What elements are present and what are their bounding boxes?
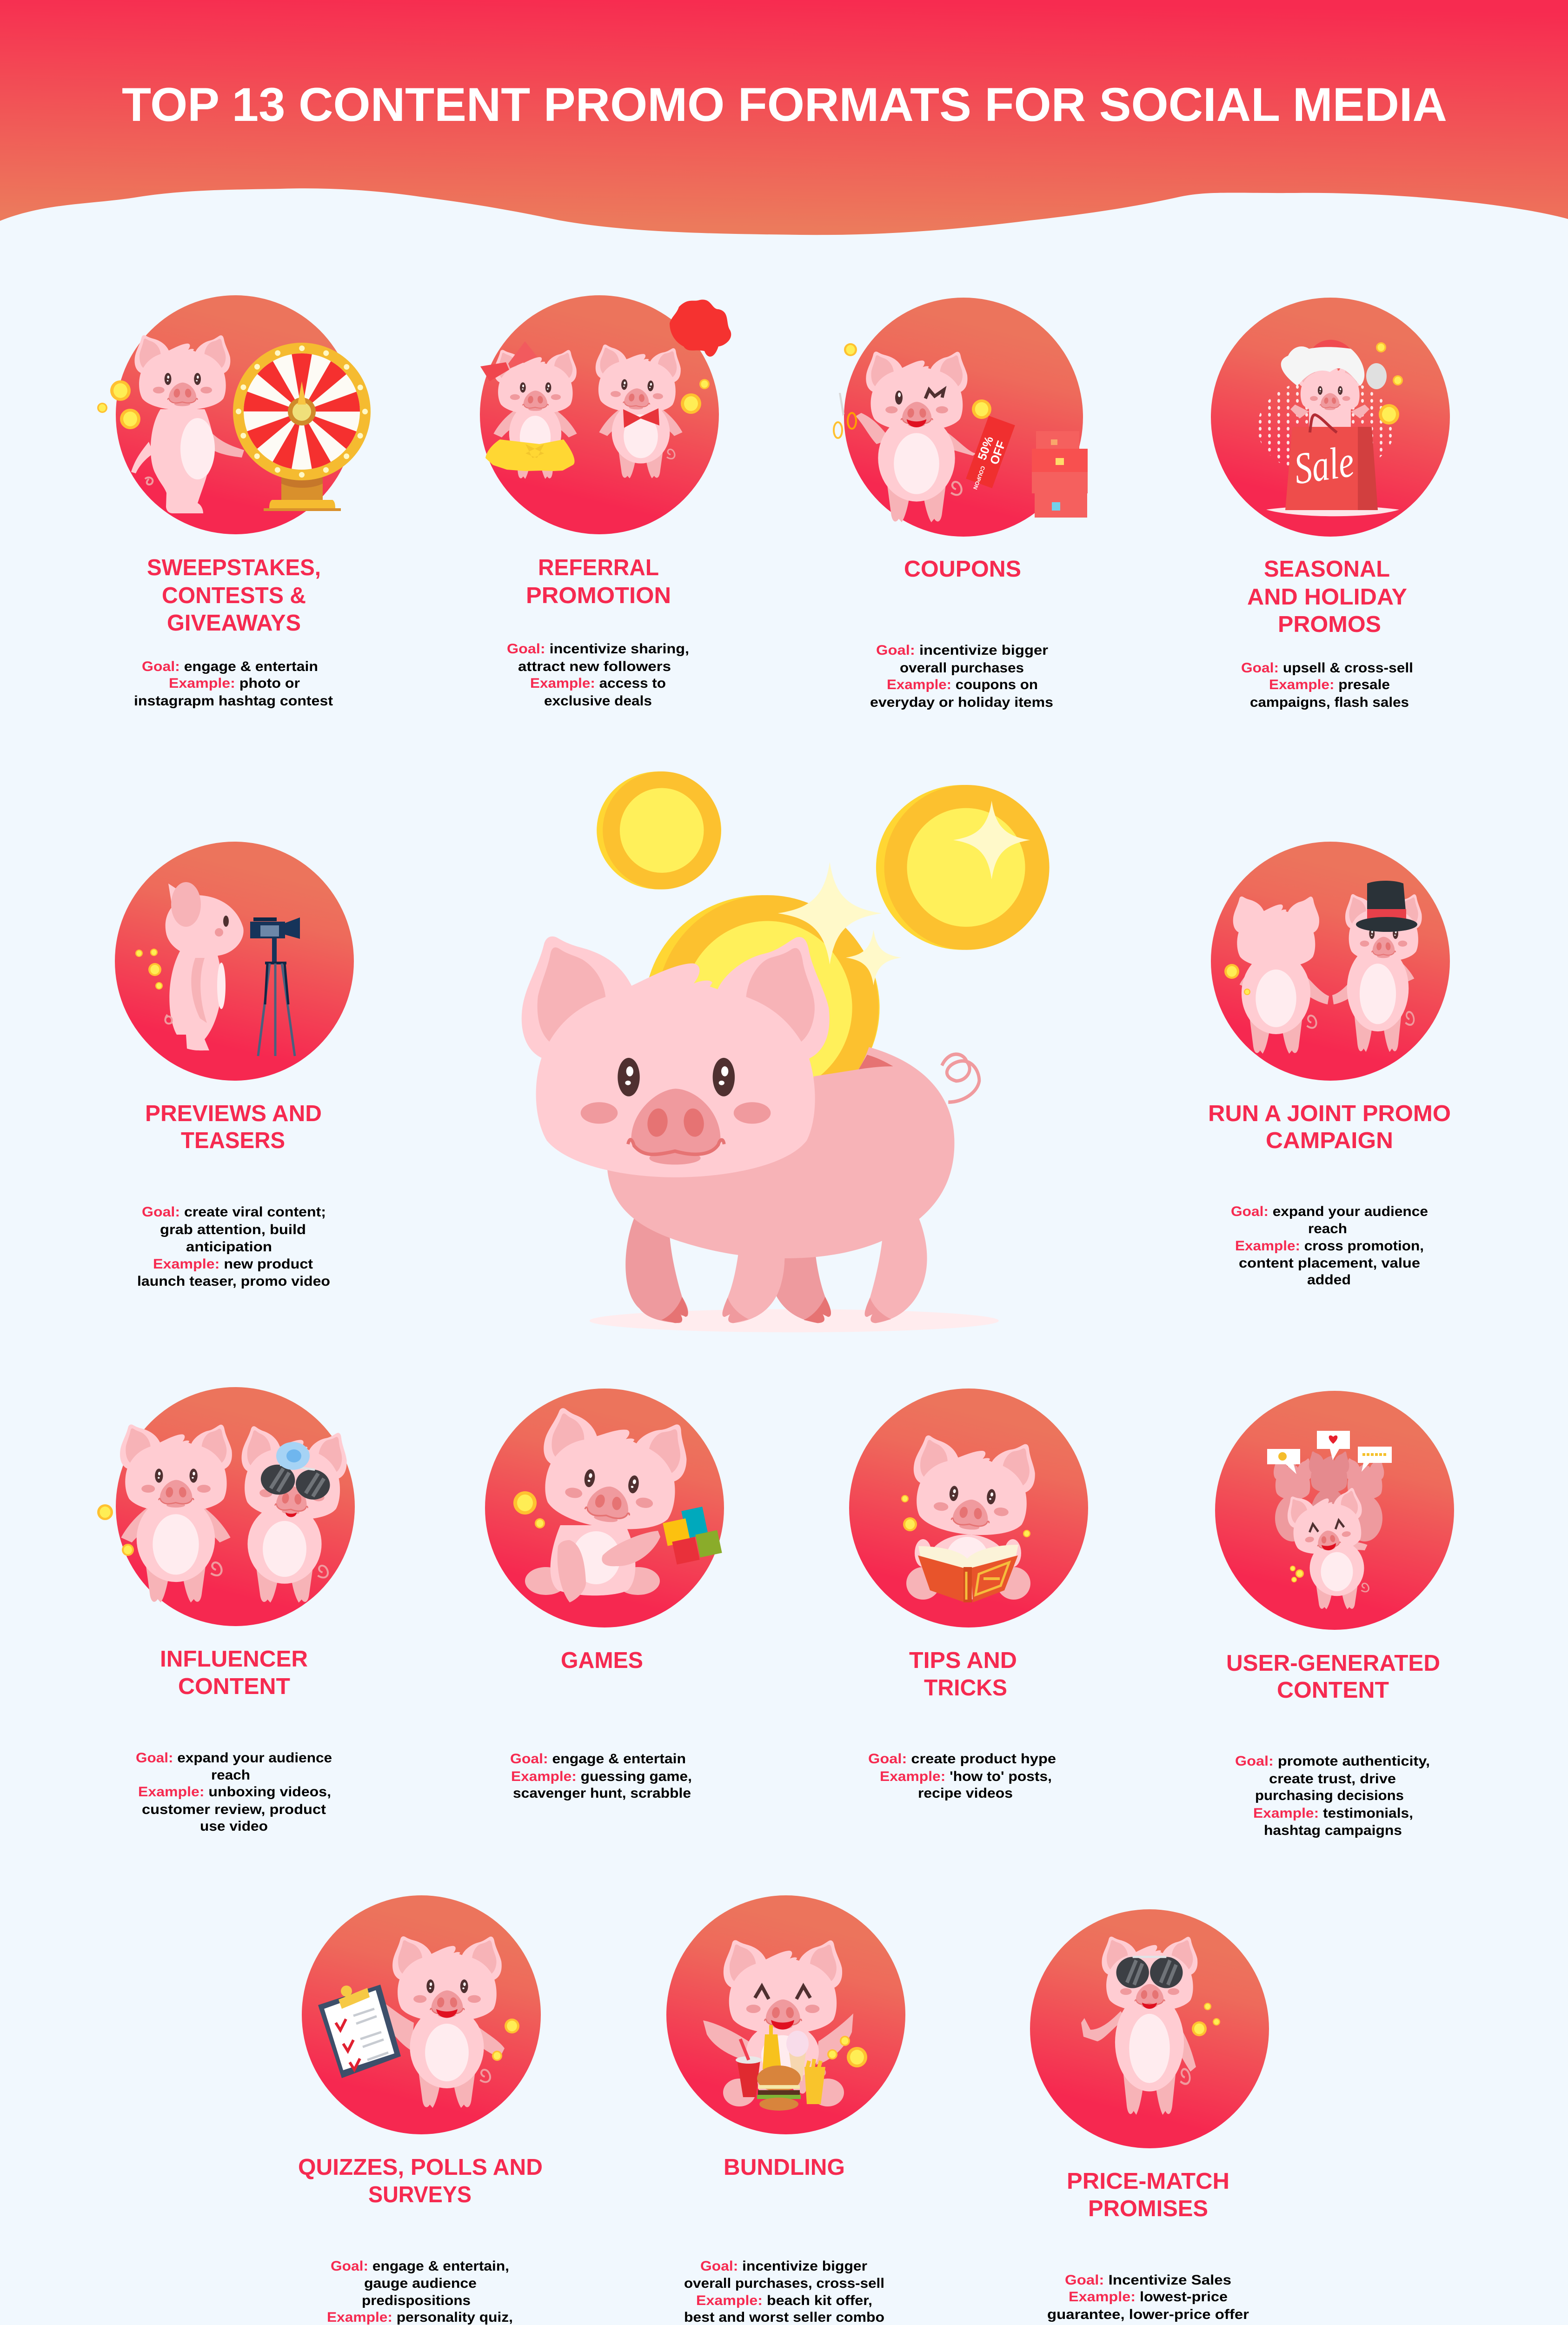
goal and example text: [136, 1750, 332, 1834]
panel: coupons: [834, 298, 1088, 710]
panel: referral promotion: [480, 295, 731, 709]
panel: sweepstakes, contests and giveaways: [97, 295, 371, 709]
heading: USER-GENERATED: [1226, 1651, 1440, 1676]
heading: CONTENT: [178, 1674, 290, 1699]
goal and example text: [1241, 660, 1413, 710]
circle background: [302, 1895, 541, 2134]
title: TOP 13 CONTENT PROMO FORMATS FOR SOCIAL MEDIA: [122, 78, 1447, 131]
panel: price-match promises: [1030, 1909, 1269, 2325]
heading: TRICKS: [924, 1675, 1007, 1701]
front legs: [723, 1218, 927, 1323]
heading: CONTESTS &: [162, 583, 306, 608]
goal and example text: Example: new product: [153, 1256, 313, 1272]
icon: santa pig in sale bag: [1257, 340, 1403, 516]
heading: [1067, 2169, 1229, 2221]
icon: two pigs, one in sunglasses: [97, 1424, 349, 1602]
panel: games: [485, 1388, 724, 1801]
panel: influencer content: [97, 1387, 355, 1834]
panel: run a joint promo campaign: [1208, 842, 1451, 1288]
panel: previews and teasers: [115, 842, 354, 1289]
heading: PROMOTION: [526, 583, 671, 608]
panel: bundling: [666, 1895, 905, 2325]
heading: [145, 1101, 322, 1153]
heading: TIPS AND: [909, 1648, 1017, 1673]
circle background: [1030, 1909, 1269, 2148]
heading: AND HOLIDAY: [1247, 585, 1407, 610]
icon: santa pig in sale bag: Sale: [1291, 436, 1357, 493]
goal and example text: [1047, 2272, 1249, 2325]
circle background: [1211, 298, 1450, 537]
goal and example text: reach: [1308, 1221, 1347, 1236]
heading: [147, 555, 321, 636]
head: [522, 937, 830, 1177]
icon: winking pig with coupon, scissors and boxes: 50%: [975, 434, 996, 462]
icon: happy pig with fast food bundle: [703, 1940, 867, 2111]
goal and example text: Goal: engage & entertain: [142, 659, 318, 674]
heading: RUN A JOINT PROMO: [1208, 1101, 1451, 1126]
goal and example text: scavenger hunt, scrabble: [513, 1786, 691, 1801]
icon: pig with prize wheel: [97, 335, 371, 513]
heading: REFERRAL: [538, 555, 659, 580]
heading: [1208, 1101, 1451, 1153]
goal and example text: Example: lowest-price: [1069, 2289, 1228, 2305]
back legs: [625, 1214, 831, 1323]
goal and example text: hashtag campaigns: [1264, 1823, 1402, 1838]
heading: SEASONAL: [1264, 557, 1390, 582]
panel: tips and tricks: [849, 1388, 1088, 1801]
goal and example text: Example: personality quiz,: [327, 2310, 513, 2325]
goal and example text: recipe videos: [918, 1786, 1013, 1801]
heading: INFLUENCER: [160, 1647, 308, 1672]
circle background: [116, 295, 355, 534]
heading: SWEEPSTAKES,: [147, 555, 321, 580]
circle background: [115, 842, 354, 1081]
goal and example text: content placement, value: [1239, 1256, 1420, 1271]
panel: quizzes, polls and surveys: [298, 1895, 543, 2325]
illustration: central piggy bank with coins: [522, 771, 1050, 1332]
goal and example text: customer review, product: [142, 1802, 326, 1817]
goal and example text: [684, 2259, 884, 2325]
heading: GIVEAWAYS: [167, 611, 301, 636]
icon: sitting pig with puzzle pieces: [513, 1406, 722, 1602]
icon: two pigs with bow, skirt and speech blob: [480, 299, 731, 479]
icon: winking pig with coupon, scissors and boxes: COUPON: [972, 465, 986, 490]
heading: PROMISES: [1088, 2196, 1208, 2221]
goal and example text: Goal: Incentivize Sales: [1065, 2272, 1231, 2288]
circle background: [1211, 842, 1450, 1081]
goal and example text: use video: [200, 1819, 268, 1834]
goal and example text: overall purchases: [900, 660, 1024, 676]
goal and example text: Example: photo or: [169, 676, 300, 691]
circle background: [116, 1387, 355, 1626]
goal and example text: everyday or holiday items: [870, 695, 1053, 710]
goal and example text: exclusive deals: [544, 693, 652, 709]
goal and example text: Goal: create product hype: [868, 1751, 1056, 1767]
icon: profile pig filming with camera on tripod: [135, 882, 300, 1056]
goal and example text: Goal: engage & entertain: [510, 1751, 686, 1767]
goal and example text: Example: unboxing videos,: [138, 1784, 331, 1800]
goal and example text: [868, 1751, 1056, 1801]
heading: [1226, 1651, 1440, 1703]
goal and example text: Example: testimonials,: [1253, 1806, 1413, 1821]
heading: [1247, 557, 1407, 637]
goal and example text: Goal: upsell & cross-sell: [1241, 660, 1413, 676]
goal and example text: attract new followers: [518, 659, 671, 674]
goal and example text: instagrapm hashtag contest: [134, 693, 333, 709]
heading: BUNDLING: [724, 2155, 845, 2180]
goal and example text: Goal: expand your audience: [136, 1750, 332, 1766]
goal and example text: [137, 1204, 330, 1289]
goal and example text: purchasing decisions: [1255, 1788, 1404, 1803]
heading: QUIZZES, POLLS AND: [298, 2155, 543, 2180]
goal and example text: Goal: create viral content;: [142, 1204, 326, 1220]
heading: PREVIEWS AND: [145, 1101, 322, 1126]
heading: SURVEYS: [368, 2182, 472, 2207]
goal and example text: campaigns, flash sales: [1250, 695, 1409, 710]
wave header shape: [0, 0, 1568, 235]
icon: pig with clipboard: [318, 1936, 519, 2108]
panel: seasonal and holiday promos: [1211, 298, 1450, 710]
goal and example text: grab attention, build: [160, 1222, 306, 1237]
curly tail: [942, 1054, 979, 1102]
icon: winking pig with coupon, scissors and boxes: OFF: [987, 439, 1008, 466]
goal and example text: Example: cross promotion,: [1235, 1238, 1424, 1254]
floating coin right: [876, 785, 1050, 950]
goal and example text: guarantee, lower-price offer: [1047, 2307, 1249, 2322]
goal and example text: added: [1307, 1272, 1351, 1288]
goal and example text: anticipation: [186, 1239, 272, 1255]
icon: pig reading a book: [901, 1435, 1038, 1602]
goal and example text: best and worst seller combo: [684, 2310, 884, 2325]
goal and example text: Example: coupons on: [887, 677, 1038, 692]
coin entering slot: [644, 895, 880, 1120]
goal and example text: [327, 2259, 513, 2325]
heading: [298, 2155, 543, 2207]
circle background: [480, 295, 719, 534]
panel: user-generated content: [1215, 1391, 1454, 1838]
goal and example text: [870, 643, 1053, 710]
goal and example text: create trust, drive: [1269, 1771, 1396, 1787]
header band: [0, 0, 1568, 235]
goal and example text: [510, 1751, 692, 1801]
heading: TEASERS: [181, 1128, 285, 1153]
goal and example text: launch teaser, promo video: [137, 1274, 330, 1289]
circle background: [844, 298, 1083, 537]
heading: CAMPAIGN: [1266, 1128, 1393, 1153]
circle background: [666, 1895, 905, 2134]
goal and example text: Goal: incentivize bigger: [700, 2259, 867, 2274]
goal and example text: [134, 659, 333, 709]
circle background: [1215, 1391, 1454, 1630]
heading: GAMES: [561, 1648, 643, 1673]
heading: PRICE-MATCH: [1067, 2169, 1229, 2194]
icon: happy pig with silhouettes and speech bubbles: [1267, 1431, 1392, 1609]
goal and example text: Goal: promote authenticity,: [1235, 1754, 1430, 1769]
heading: [526, 555, 671, 608]
ground shadow: [590, 1309, 999, 1332]
goal and example text: reach: [211, 1767, 250, 1783]
icon: two pigs shaking hands, top hat: [1224, 881, 1422, 1054]
goal and example text: Example: access to: [530, 676, 666, 691]
floating coin left: [597, 771, 721, 890]
circle background: [849, 1388, 1088, 1628]
heading: [909, 1648, 1017, 1701]
goal and example text: Example: presale: [1269, 677, 1390, 692]
goal and example text: predispositions: [362, 2293, 471, 2308]
goal and example text: Example: guessing game,: [511, 1769, 692, 1784]
sparkles: [778, 862, 901, 985]
goal and example text: gauge audience: [364, 2276, 477, 2291]
goal and example text: Goal: expand your audience: [1231, 1204, 1428, 1219]
goal and example text: [1235, 1754, 1430, 1838]
goal and example text: overall purchases, cross-sell: [684, 2276, 884, 2291]
goal and example text: Goal: incentivize sharing,: [507, 641, 689, 657]
body: [607, 1047, 954, 1258]
heading: COUPONS: [904, 557, 1021, 582]
heading: PROMOS: [1278, 612, 1381, 637]
icon: winking pig with coupon, scissors and boxes: [834, 343, 1088, 522]
goal and example text: Example: beach kit offer,: [696, 2293, 872, 2308]
heading: CONTENT: [1277, 1678, 1389, 1703]
goal and example text: [507, 641, 689, 709]
circle background: [485, 1388, 724, 1628]
goal and example text: Goal: engage & entertain,: [331, 2259, 509, 2274]
goal and example text: Goal: incentivize bigger: [876, 643, 1048, 658]
goal and example text: Example: 'how to' posts,: [880, 1769, 1052, 1784]
heading: [160, 1647, 308, 1699]
goal and example text: [1231, 1204, 1428, 1288]
icon: pig in sunglasses giving thumbs up: [1081, 1937, 1220, 2115]
